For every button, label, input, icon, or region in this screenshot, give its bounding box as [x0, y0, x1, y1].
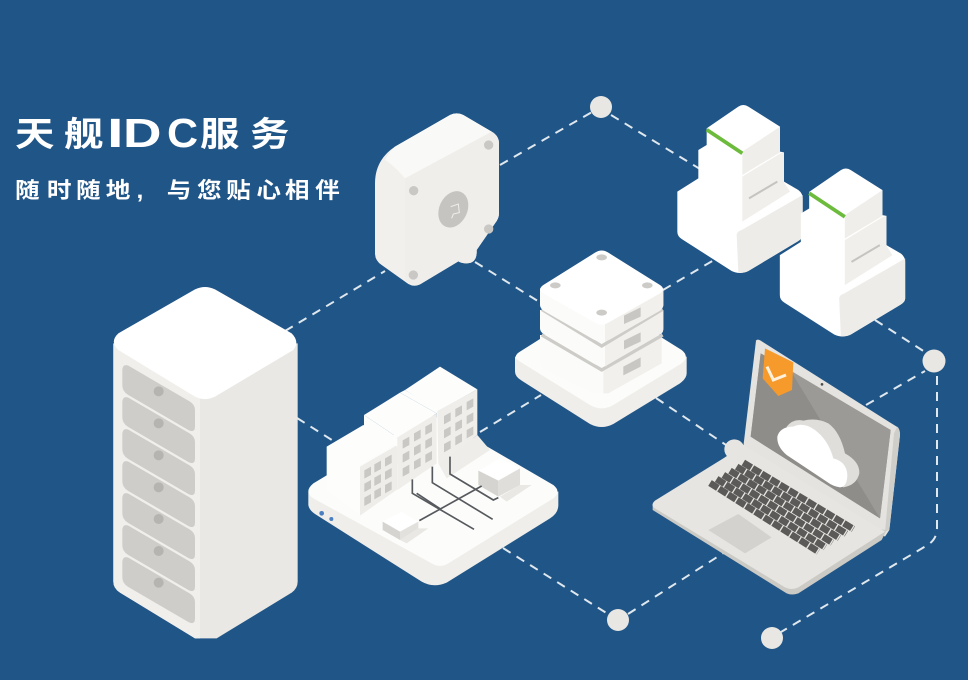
- network nodes: [590, 96, 946, 649]
- dashed network connections: [285, 112, 937, 632]
- security badge: [763, 348, 793, 396]
- middle layer: [540, 310, 663, 366]
- title: 务: [250, 116, 289, 153]
- title: D: [123, 111, 161, 156]
- laptop lid: [743, 340, 900, 537]
- base plate: [515, 300, 687, 427]
- icon: server stack: [515, 250, 687, 427]
- middle building: [364, 393, 437, 490]
- title: 天: [15, 116, 55, 153]
- title: 服: [200, 116, 240, 153]
- left small box: [383, 512, 428, 543]
- cloud: [777, 419, 859, 487]
- top layer: [540, 288, 663, 341]
- icon: storage tower 2: [780, 168, 905, 336]
- icon: wall-mounted device: [375, 113, 499, 286]
- icon: storage tower 1: [677, 105, 803, 273]
- right building: [400, 367, 477, 464]
- lower layer: [540, 335, 662, 393]
- cabling: [412, 457, 498, 529]
- keyboard: [710, 463, 853, 552]
- title: C: [167, 110, 198, 156]
- laptop base: [652, 439, 887, 594]
- right small box: [478, 458, 532, 502]
- windows: [364, 398, 473, 506]
- title: 舰: [64, 116, 103, 153]
- icon: data center campus: [308, 367, 558, 585]
- indicator lights: [319, 511, 333, 521]
- title: [15, 110, 289, 156]
- subtitle: 随时随地,与您贴心相伴: [15, 178, 340, 203]
- left building: [327, 425, 397, 516]
- title: I: [107, 110, 124, 156]
- icon: laptop with cloud: [652, 340, 900, 594]
- icon: server rack: [113, 287, 298, 638]
